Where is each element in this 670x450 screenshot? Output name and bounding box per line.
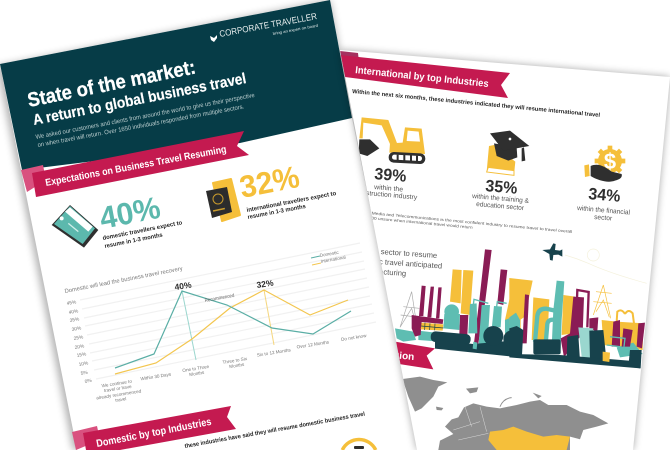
chart y axis labels: 35% — [69, 316, 81, 324]
banner: international — [340, 51, 510, 98]
chart legend: International — [320, 255, 346, 264]
chart y axis labels: 30% — [71, 325, 83, 333]
icon: plane — [542, 243, 647, 283]
chart x axis labels: Within 30 Days — [140, 372, 172, 381]
chart legend: Domestic — [319, 250, 340, 258]
line chart: 32% — [256, 278, 275, 290]
chart y axis labels: 25% — [73, 334, 85, 342]
stat: 32%: resume in 1-3 months — [247, 204, 307, 221]
manufacturing text: The sector to resume — [365, 246, 437, 260]
stat: 34%: within the financial — [576, 205, 631, 217]
chart legend — [311, 250, 346, 265]
stat: 35%: 35% — [485, 177, 518, 198]
chart x axis labels: We continue to — [101, 379, 133, 388]
banner text: Region — [380, 349, 415, 363]
footnote text — [372, 212, 572, 233]
header band — [0, 0, 352, 170]
chart x axis labels — [96, 333, 367, 403]
icon: ticket — [52, 205, 98, 248]
illustration: industrial skyline right — [509, 278, 645, 368]
banner: expectations: Expectations on Business Travel Resuming — [45, 144, 227, 189]
chart x axis labels: already recommenced — [96, 388, 142, 401]
icon: excavator — [359, 117, 426, 164]
domestic subheading: these industries have said they will resume domestic business travel — [184, 412, 366, 450]
chart y axis labels: 20% — [74, 343, 86, 351]
icon: passport — [206, 179, 240, 221]
line chart: Recommenced — [204, 293, 235, 304]
world map — [403, 377, 608, 450]
footnote text: Over 100 unsure when international travel would return — [357, 214, 473, 230]
chart y axis labels: 40% — [68, 308, 80, 316]
stat: 34% — [577, 188, 630, 220]
line chart: 40% — [174, 280, 193, 292]
stat: 40%: domestic travellers expect to — [102, 220, 183, 242]
chart x axis labels: Months — [229, 362, 245, 369]
subtitle: A return to global business travel — [31, 70, 248, 129]
stat: 39%: within the — [373, 184, 404, 194]
banner: expectations — [21, 131, 249, 197]
chart x axis labels: travel — [115, 396, 127, 403]
illustration: industrial skyline left — [395, 249, 521, 357]
banner: domestic — [72, 406, 236, 450]
line chart: Domestic will lead the business travel recovery — [64, 266, 183, 295]
stat: 32%: 32% — [237, 159, 302, 205]
manufacturing text — [380, 250, 442, 278]
chart x axis labels: Months — [189, 370, 205, 377]
banner: domestic: Domestic by top Industries — [95, 416, 213, 450]
banner: region — [395, 342, 435, 369]
chart x axis labels: Over 12 Months — [296, 339, 330, 350]
chart y axis labels: 45% — [66, 299, 78, 307]
manufacturing text: manufacturing — [358, 266, 406, 278]
stat: 34%: 34% — [588, 185, 621, 206]
stat: 40%: 40% — [97, 190, 163, 236]
stat: 40% — [97, 190, 183, 250]
banner: international: International by top Industries — [355, 65, 489, 90]
logo: bring an expert on board — [272, 24, 318, 36]
chart x axis labels: One to Three — [182, 364, 210, 373]
stat: 39%: construction industry — [355, 189, 418, 202]
stat: 35%: within the training & — [471, 193, 530, 205]
icon: hand with gear and dollar — [584, 146, 625, 182]
stat: 39%: 39% — [374, 165, 407, 186]
icon: hand with gear and dollar: $ — [604, 149, 616, 174]
stat: 35% — [472, 180, 529, 210]
chart y axis labels: 0% — [84, 378, 93, 385]
stat: 32%: international travellers expect to — [246, 191, 337, 214]
stat: 35%: education sector — [476, 201, 525, 212]
chart x axis labels: Three to Six — [222, 356, 248, 365]
intro text: on when travel will return. Over 1650 individuals responded from multiple sectors. — [37, 103, 245, 149]
chart y axis labels: 5% — [80, 370, 89, 377]
title: State of the market: — [26, 57, 198, 112]
stat: 32% — [237, 159, 337, 221]
chart x axis labels: Do not know — [341, 333, 367, 342]
logo: CORPORATE TRAVELLER — [219, 11, 318, 39]
manufacturing text: domestic travel anticipated — [352, 255, 442, 270]
line chart — [64, 243, 376, 403]
intro text: We asked our customers and clients from around the world to give us their perspective — [35, 92, 256, 141]
stat: 39% — [367, 168, 418, 201]
chart y axis labels — [66, 299, 93, 385]
footnote text: Within Media and Telecommunications is the most confident industry to resume travel to travel overall — [357, 209, 573, 234]
international subheading: Within the next six months, these industries indicated they will resume international travel — [352, 89, 601, 119]
panel: left page — [0, 0, 420, 450]
chart x axis labels: travel or have — [104, 384, 132, 393]
icon: graduation cap and book — [487, 131, 529, 175]
stat: 40%: resume in 1-3 months — [104, 232, 164, 250]
chart x axis labels: Six to 12 Months — [256, 347, 292, 358]
chart y axis labels: 10% — [78, 360, 90, 368]
stat: 34%: sector — [594, 214, 613, 223]
panel: right page — [340, 50, 670, 450]
chart y axis labels: 15% — [76, 351, 88, 359]
icon: yellow ring — [342, 439, 376, 450]
